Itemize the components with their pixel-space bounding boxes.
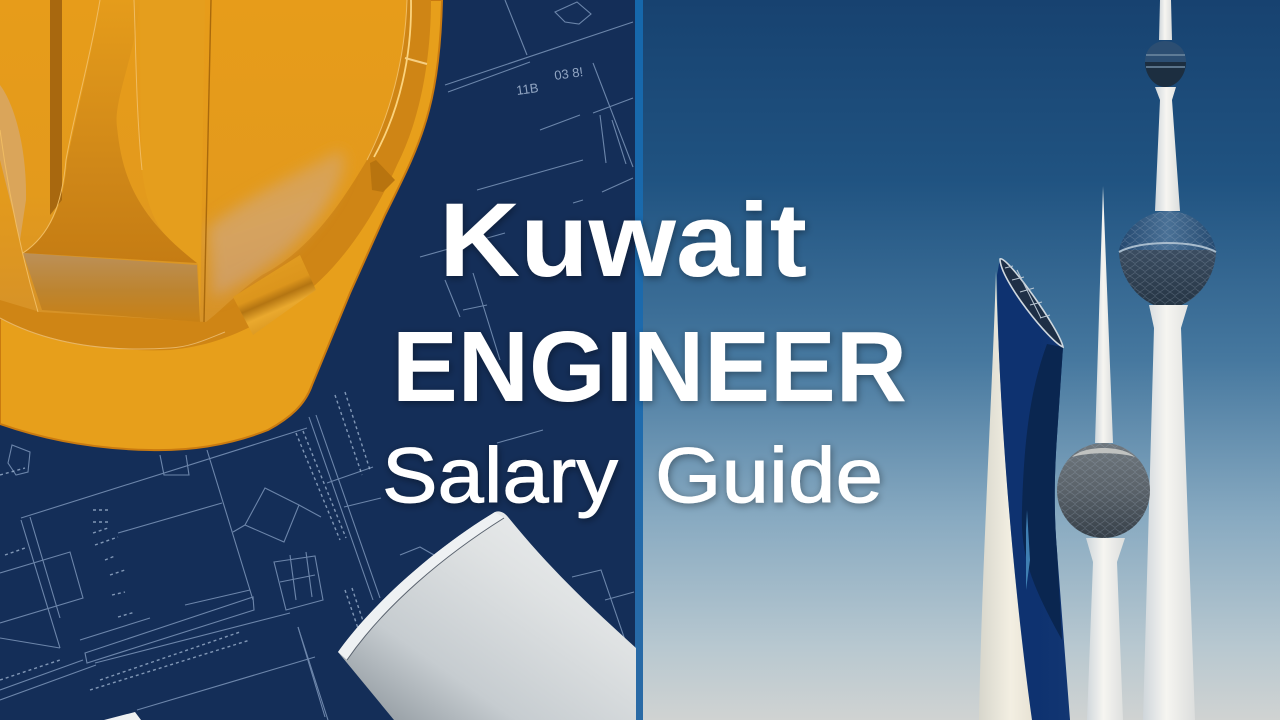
icon: rolled blueprint xyxy=(104,511,636,720)
hat brim xyxy=(0,0,442,450)
ridge highlights xyxy=(0,0,411,349)
hat dome xyxy=(0,0,407,322)
blueprint dimension numbers: 11B xyxy=(515,80,539,98)
blueprint line drawing xyxy=(0,0,634,720)
blueprint dashed annotations xyxy=(0,392,370,690)
sail dark fold xyxy=(1022,344,1063,640)
panel: blueprint background xyxy=(0,0,636,720)
panel: sky xyxy=(643,0,1280,720)
divider xyxy=(635,0,643,720)
left groove xyxy=(50,0,62,215)
Kuwait towers xyxy=(979,0,1216,720)
ridge recess xyxy=(23,253,200,322)
side clip xyxy=(233,255,316,335)
blueprint dimension numbers: 03 8! xyxy=(553,64,584,83)
title word: Salary: Salary xyxy=(382,431,618,519)
ridge neck xyxy=(23,0,197,263)
paper corner xyxy=(104,712,141,720)
icon: hard hat xyxy=(0,0,442,450)
left reflection xyxy=(0,85,26,240)
tall tower large sphere xyxy=(1119,211,1216,308)
title line: ENGINEER: ENGINEER xyxy=(392,311,907,423)
centre band xyxy=(140,0,205,322)
tall tower xyxy=(1119,0,1216,720)
centre seam xyxy=(204,0,211,322)
tall tower small sphere xyxy=(1145,41,1186,87)
sail opening xyxy=(1000,259,1063,347)
sail tower xyxy=(979,259,1070,720)
blueprint dimension numbers xyxy=(515,64,584,98)
mid tower sphere xyxy=(1057,443,1150,538)
dome reflection xyxy=(208,150,344,298)
top notch marks xyxy=(405,58,427,64)
title line: Kuwait: Kuwait xyxy=(439,182,807,299)
rim band xyxy=(0,0,431,350)
rear clip xyxy=(370,160,395,192)
sail highlight xyxy=(1026,510,1030,590)
title xyxy=(382,182,907,519)
title word: Guide: Guide xyxy=(655,431,883,519)
mid tower xyxy=(1057,186,1150,720)
